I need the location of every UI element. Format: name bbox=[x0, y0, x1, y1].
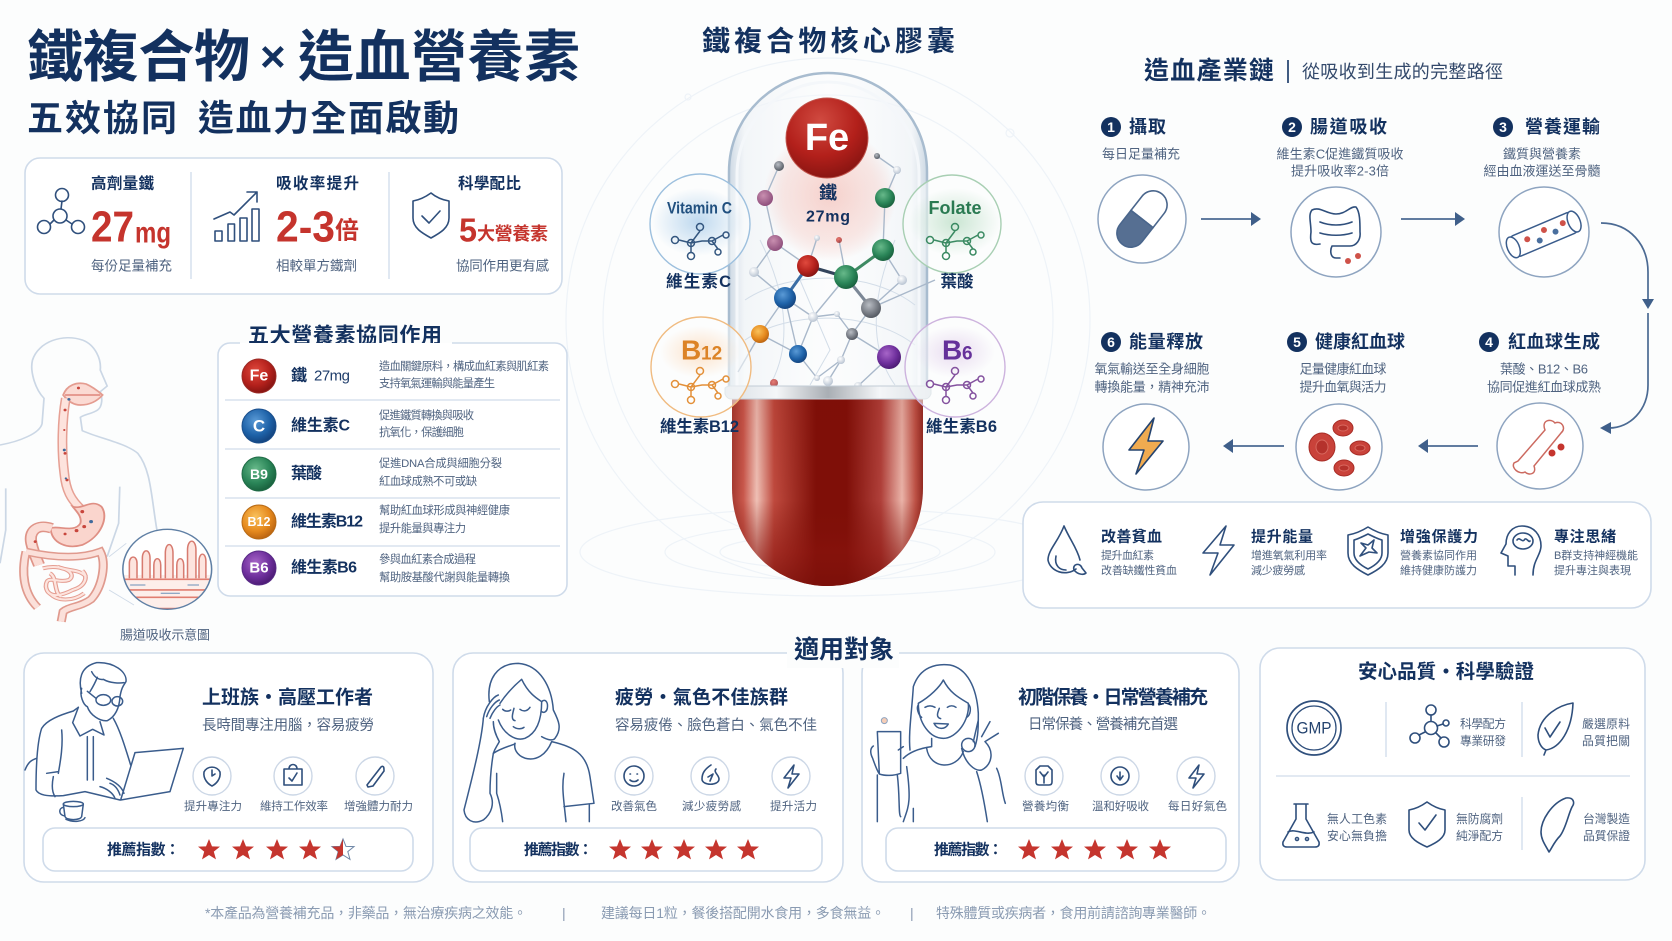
row: B6: 幫助胺基酸代謝與能量轉換 bbox=[379, 570, 510, 584]
row: B12: 維生素B12 bbox=[291, 512, 363, 530]
stat: absorption: 吸收率提升 bbox=[276, 174, 359, 192]
panel: benefits bbox=[1023, 502, 1651, 608]
icon: red cells bbox=[1309, 420, 1370, 476]
row: vitamin C: C bbox=[253, 416, 265, 436]
row: folate: 葉酸 bbox=[291, 464, 322, 482]
icon: gentle absorption bbox=[1092, 757, 1150, 813]
icon: good complexion bbox=[1168, 757, 1228, 813]
row: vitamin C bbox=[242, 408, 474, 443]
icon: shield bbox=[413, 193, 449, 238]
row: iron bbox=[242, 359, 549, 393]
icon: intestine bbox=[1310, 207, 1361, 264]
rating: 推薦指數： bbox=[934, 840, 1003, 858]
iron sphere: Fe bbox=[805, 117, 849, 159]
step 2: gut absorption: 維生素C促進鐵質吸收 bbox=[1276, 146, 1404, 162]
subtitle: 五效協同 bbox=[27, 98, 177, 138]
step 5: healthy red cells: 足量健康紅血球 bbox=[1300, 362, 1386, 376]
item: no preservatives: 無防腐劑 bbox=[1456, 812, 1503, 826]
step 5: healthy red cells: 5 bbox=[1293, 334, 1301, 350]
bubble: B6: 6 bbox=[962, 344, 973, 364]
badge: GMP bbox=[1287, 701, 1341, 755]
heading: 上班族・高壓工作者 bbox=[202, 686, 373, 708]
icon: lightning bolt bbox=[1129, 418, 1163, 474]
row: B6 bbox=[242, 551, 510, 585]
row: B12 bbox=[242, 503, 510, 539]
row: B6: 參與血紅素合成過程 bbox=[379, 552, 476, 566]
icon: focus bbox=[184, 757, 242, 813]
stat: absorption: 倍 bbox=[335, 216, 359, 244]
panel: key stats bbox=[25, 158, 562, 294]
step 2: gut absorption bbox=[1276, 117, 1404, 277]
stat: absorption: 2-3 bbox=[276, 202, 335, 252]
bubble: vitamin C bbox=[650, 174, 750, 291]
icon: vitality bbox=[770, 757, 817, 813]
row: folate: B9 bbox=[250, 466, 268, 482]
step 2: gut absorption: 腸道吸收 bbox=[1310, 117, 1387, 137]
step 3: nutrient transport: 營養運輸 bbox=[1525, 116, 1600, 137]
icon: molecule bbox=[38, 188, 84, 234]
step 4: red cell formation bbox=[1479, 331, 1601, 489]
benefit: protection: 增強保護力 bbox=[1400, 528, 1478, 546]
icon: blood vessel bbox=[1503, 209, 1584, 260]
step 6: energy release: 轉換能量，精神充沛 bbox=[1094, 380, 1210, 394]
iron label bbox=[806, 182, 850, 226]
item: no colorants bbox=[1283, 804, 1387, 847]
step 4: red cell formation: 葉酸、B12、B6 bbox=[1500, 362, 1588, 376]
step 5: healthy red cells: 提升血氧與活力 bbox=[1300, 380, 1386, 394]
item: Taiwan made bbox=[1541, 798, 1630, 852]
footer disclaimer: 特殊體質或疾病者，食用前請諮詢專業醫師。 bbox=[936, 905, 1211, 921]
item: science: 科學配方 bbox=[1460, 717, 1506, 731]
benefit: focus bbox=[1501, 526, 1638, 577]
row: B12: B12 bbox=[248, 515, 271, 529]
row: B12: 幫助紅血球形成與神經健康 bbox=[379, 503, 510, 517]
icon: balance: 營養均衡 bbox=[1022, 799, 1070, 813]
row: B6: 維生素B6 bbox=[291, 558, 357, 576]
illustration: capsule bbox=[725, 73, 935, 586]
description: 日常保養、營養補充首選 bbox=[1028, 715, 1178, 733]
heading: blood chain: 從吸收到生成的完整路徑 bbox=[1302, 62, 1503, 82]
step 6: energy release: 6 bbox=[1107, 334, 1115, 350]
footer disclaimer: *本產品為營養補充品，非藥品，無治療疾病之效能。 bbox=[205, 905, 527, 921]
benefit: protection: 營養素協同作用 bbox=[1400, 548, 1477, 562]
card: office workers bbox=[24, 653, 433, 882]
description: 長時間專注用腦，容易疲勞 bbox=[202, 717, 374, 734]
step 6: energy release bbox=[1094, 332, 1210, 490]
item: no colorants: 安心無負擔 bbox=[1327, 829, 1387, 843]
benefit: energy: 減少疲勞感 bbox=[1251, 563, 1305, 577]
stat: formula: 協同作用更有感 bbox=[456, 258, 550, 274]
stat: formula: 5 bbox=[459, 212, 477, 248]
stat: high dose iron: 每份足量補充 bbox=[91, 258, 172, 274]
card: beginners bbox=[862, 653, 1239, 882]
row: iron: Fe bbox=[250, 368, 268, 384]
heading: 疲勞・氣色不佳族群 bbox=[615, 686, 788, 708]
caption: intestinal diagram: 腸道吸收示意圖 bbox=[120, 628, 210, 642]
bubble: folate bbox=[903, 175, 1001, 291]
panel: quality bbox=[1260, 648, 1645, 880]
row: iron: 鐵 bbox=[291, 366, 307, 384]
benefit: anemia bbox=[1048, 526, 1177, 577]
panel: five nutrients bbox=[218, 343, 567, 596]
subtitle: 造血力全面啟動 bbox=[198, 98, 459, 138]
benefit: energy: 提升能量 bbox=[1251, 528, 1313, 546]
icon: pill bbox=[1111, 185, 1173, 253]
item: Taiwan made: 品質保證 bbox=[1583, 829, 1630, 843]
heading: core capsule: 鐵複合物核心膠囊 bbox=[702, 26, 955, 56]
benefit: focus: B群支持神經機能 bbox=[1554, 548, 1638, 562]
bubble: vitamin C: 維生素C bbox=[666, 272, 731, 291]
step 5: healthy red cells: 健康紅血球 bbox=[1315, 331, 1405, 352]
bubble: B12: B bbox=[681, 334, 701, 366]
icon: rising bar chart bbox=[214, 192, 259, 241]
rating bbox=[470, 828, 822, 871]
rating: 推薦指數： bbox=[524, 840, 593, 858]
icon: clipboard: 維持工作效率 bbox=[260, 799, 328, 813]
heading: five nutrients: 五大營養素協同作用 bbox=[248, 324, 442, 348]
step 3: nutrient transport: 3 bbox=[1499, 119, 1507, 135]
icon: good complexion: 每日好氣色 bbox=[1168, 799, 1228, 813]
icon: endurance: 增強體力耐力 bbox=[344, 799, 413, 813]
benefit: anemia: 改善貧血 bbox=[1101, 528, 1162, 546]
arrow: step 2 to 3 bbox=[1401, 212, 1465, 226]
card: fatigue bbox=[453, 653, 843, 882]
step 4: red cell formation: 4 bbox=[1485, 334, 1493, 350]
illustration: human digestive tract bbox=[0, 338, 214, 622]
heading: blood chain: 造血產業鏈 bbox=[1144, 57, 1274, 85]
step 6: energy release: 能量釋放 bbox=[1129, 332, 1203, 352]
item: Taiwan made: 台灣製造 bbox=[1583, 812, 1630, 826]
arrow: step 4 to 5 bbox=[1418, 439, 1478, 453]
bubble: B12: 維生素B12 bbox=[660, 417, 739, 436]
item: science: 專業研發 bbox=[1460, 734, 1506, 748]
heading: 初階保養・日常營養補充 bbox=[1018, 686, 1208, 708]
bubble: B12 bbox=[651, 317, 751, 436]
row: iron: 支持氧氣運輸與能量產生 bbox=[379, 376, 495, 390]
stat: absorption bbox=[276, 174, 359, 274]
icon: complexion: 改善氣色 bbox=[611, 799, 658, 813]
step 1: intake bbox=[1098, 117, 1186, 263]
arrow: step 1 to 2 bbox=[1201, 212, 1261, 226]
item: ingredients bbox=[1538, 703, 1630, 755]
icon: vitality: 提升活力 bbox=[770, 799, 817, 813]
bubble: folate: 葉酸 bbox=[940, 271, 974, 291]
title: 鐵複合物 bbox=[27, 26, 250, 88]
iron sphere bbox=[786, 98, 868, 178]
icon: clipboard bbox=[260, 757, 328, 813]
icon: bone bbox=[1513, 420, 1564, 474]
footer disclaimer bbox=[205, 905, 1211, 921]
benefit: energy: 增進氧氣利用率 bbox=[1251, 548, 1327, 562]
stat: high dose iron: 高劑量鐵 bbox=[91, 174, 154, 192]
rating bbox=[43, 828, 413, 871]
step 1: intake: 每日足量補充 bbox=[1102, 146, 1180, 162]
rating bbox=[886, 828, 1226, 871]
row: vitamin C: 促進鐵質轉換與吸收 bbox=[379, 408, 474, 422]
rating: 推薦指數： bbox=[107, 840, 180, 858]
magnifier: intestinal villi bbox=[119, 529, 214, 612]
row: vitamin C: 維生素C bbox=[291, 416, 350, 434]
heading: 安心品質・科學驗證 bbox=[1358, 660, 1534, 683]
icon: gentle absorption: 溫和好吸收 bbox=[1092, 799, 1150, 813]
step 3: nutrient transport bbox=[1484, 116, 1600, 277]
stat: high dose iron bbox=[91, 174, 172, 274]
step 3: nutrient transport: 經由血液運送至骨髓 bbox=[1484, 164, 1600, 178]
item: no preservatives: 純淨配方 bbox=[1456, 829, 1503, 843]
benefit: anemia: 提升血紅素 bbox=[1101, 548, 1154, 562]
row: iron: 造血關鍵原料，構成血紅素與肌紅素 bbox=[379, 359, 549, 373]
row: B6: B6 bbox=[249, 560, 269, 576]
bubble: B6 bbox=[905, 317, 1005, 436]
step 4: red cell formation: 紅血球生成 bbox=[1508, 331, 1600, 352]
row: vitamin C: 抗氧化，保護細胞 bbox=[379, 425, 464, 439]
icon: endurance bbox=[344, 757, 413, 813]
row: B12: 提升能量與專注力 bbox=[379, 521, 466, 535]
step 5: healthy red cells bbox=[1287, 331, 1405, 490]
icon: balance bbox=[1022, 757, 1070, 813]
illustration: woman with water bbox=[871, 665, 1005, 822]
title: × bbox=[260, 32, 286, 82]
item: no preservatives bbox=[1409, 802, 1503, 847]
benefit: focus: 提升專注與表現 bbox=[1554, 563, 1631, 577]
bubble: B6: 維生素B6 bbox=[926, 417, 997, 436]
heading: blood chain bbox=[1144, 57, 1503, 85]
row: folate: 促進DNA合成與細胞分裂 bbox=[379, 456, 502, 470]
capsule upper glass half bbox=[729, 73, 927, 390]
footer disclaimer: | bbox=[562, 905, 566, 921]
title: 造血營養素 bbox=[298, 26, 580, 88]
step 6: energy release: 氧氣輸送至全身細胞 bbox=[1094, 362, 1210, 376]
stat: high dose iron: mg bbox=[135, 216, 171, 250]
bubble: B12: 12 bbox=[701, 344, 722, 364]
stat: formula: 科學配比 bbox=[458, 174, 521, 192]
benefit: energy bbox=[1203, 526, 1327, 577]
capsule lower red half bbox=[732, 396, 923, 586]
footer disclaimer: | bbox=[910, 905, 914, 921]
stat: formula: 大營養素 bbox=[477, 224, 548, 244]
item: ingredients: 品質把關 bbox=[1582, 734, 1630, 748]
item: ingredients: 嚴選原料 bbox=[1582, 717, 1630, 731]
description: 容易疲倦、臉色蒼白、氣色不佳 bbox=[615, 717, 817, 734]
bubble: folate: Folate bbox=[928, 198, 982, 218]
badge: GMP: GMP bbox=[1296, 718, 1332, 738]
illustration: man with laptop bbox=[25, 663, 183, 821]
benefit: protection: 維持健康防護力 bbox=[1400, 563, 1477, 577]
title bbox=[27, 26, 580, 88]
step 3: nutrient transport: 鐵質與營養素 bbox=[1503, 146, 1581, 162]
row: folate bbox=[242, 456, 502, 491]
iron label: 27mg bbox=[806, 208, 850, 226]
bubble: B6: B bbox=[942, 334, 962, 366]
iron label: 鐵 bbox=[819, 182, 837, 203]
icon: complexion bbox=[611, 757, 658, 813]
footer disclaimer: 建議每日1粒，餐後搭配開水食用，多食無益。 bbox=[601, 905, 885, 921]
item: no colorants: 無人工色素 bbox=[1327, 812, 1387, 826]
seam bbox=[725, 386, 931, 399]
molecule network bbox=[738, 153, 935, 390]
row: folate: 紅血球成熟不可或缺 bbox=[379, 474, 477, 488]
step 4: red cell formation: 協同促進紅血球成熟 bbox=[1487, 380, 1601, 394]
arrow: step 3 to 4 bbox=[1600, 223, 1654, 434]
icon: reduce fatigue bbox=[682, 757, 742, 813]
step 1: intake: 攝取 bbox=[1129, 117, 1166, 137]
subtitle bbox=[27, 98, 459, 138]
benefit: anemia: 改善缺鐵性貧血 bbox=[1101, 563, 1177, 577]
illustration: tired woman bbox=[464, 663, 594, 822]
icon: reduce fatigue: 減少疲勞感 bbox=[682, 799, 742, 813]
step 2: gut absorption: 2 bbox=[1288, 119, 1296, 135]
stat: formula bbox=[456, 174, 550, 274]
bubble: vitamin C: Vitamin C bbox=[667, 198, 732, 218]
icon: focus: 提升專注力 bbox=[184, 799, 242, 813]
stat: absorption: 相較單方鐵劑 bbox=[276, 258, 357, 274]
row: iron: 27mg bbox=[314, 368, 350, 384]
benefit: focus: 專注思緒 bbox=[1554, 528, 1616, 546]
item: science bbox=[1410, 705, 1506, 748]
benefit: protection bbox=[1348, 527, 1478, 577]
step 1: intake: 1 bbox=[1107, 119, 1115, 135]
arrow: step 5 to 6 bbox=[1223, 439, 1284, 453]
heading: target groups: 適用對象 bbox=[794, 635, 894, 664]
stat: high dose iron: 27 bbox=[91, 202, 134, 252]
step 2: gut absorption: 提升吸收率2-3倍 bbox=[1291, 164, 1389, 178]
